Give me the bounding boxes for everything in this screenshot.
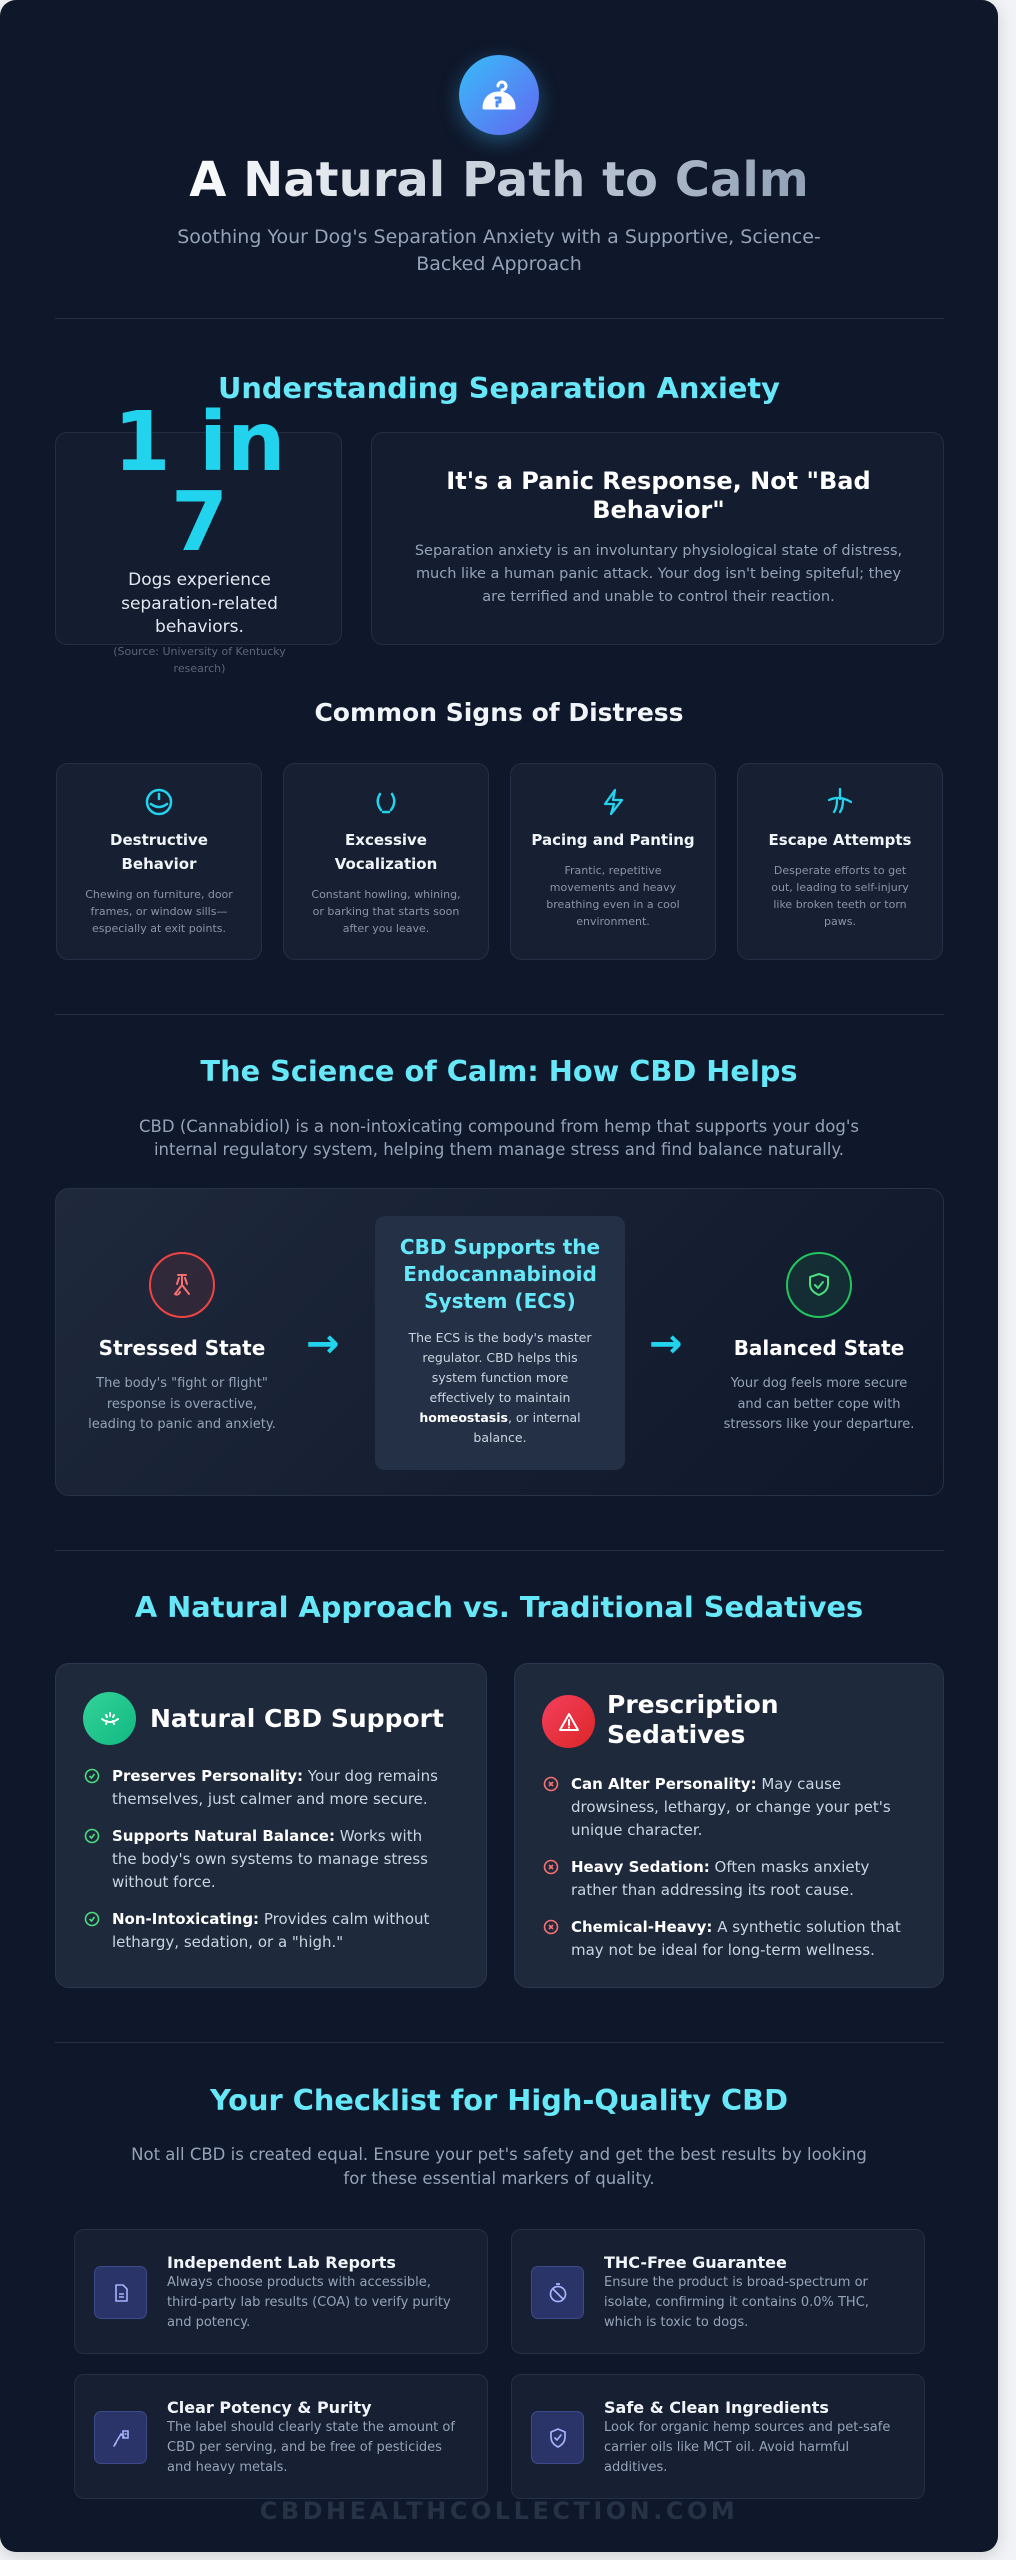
panic text: Separation anxiety is an involuntary physiological state of distress, much like a human panic attack. Your dog isn't being spiteful; they are terrified and unable to control their reaction. — [415, 543, 902, 605]
stressed state — [88, 1252, 276, 1432]
checklist: lab reports — [74, 2229, 488, 2354]
ecs box: The ECS is the body's master regulator. CBD helps this system function more effectively to maintain homeostasis, or internal balance. — [408, 1330, 592, 1445]
sign: escape — [737, 763, 943, 960]
sign: vocalization — [283, 763, 489, 960]
heading: common signs: Common Signs of Distress — [314, 698, 684, 727]
icon: leaf — [83, 1692, 136, 1745]
checklist: potency: The label should clearly state the amount of CBD per serving, and be free of pesticides and heavy metals. — [167, 2420, 455, 2475]
checklist: thc free: Ensure the product is broad-spectrum or isolate, confirming it contains 0.0% THC, which is toxic to dogs. — [604, 2275, 869, 2330]
stat number: 1 in — [113, 395, 286, 490]
sign: vocalization: Excessive Vocalization — [335, 831, 437, 873]
sign: destructive: Chewing on furniture, door frames, or window sills—especially at exit points. — [85, 888, 233, 935]
heading: comparison: A Natural Approach vs. Traditional Sedatives — [135, 1590, 863, 1624]
checklist: ingredients: Safe & Clean Ingredients — [604, 2398, 829, 2417]
checklist: lab reports: Independent Lab Reports — [167, 2253, 396, 2272]
checklist: ingredients — [511, 2374, 925, 2499]
panel: ecs flow — [55, 1188, 944, 1496]
sedatives list: Heavy Sedation: Often masks anxiety rather than addressing its root cause. — [571, 1858, 869, 1899]
sedatives title: Prescription — [607, 1690, 779, 1719]
icon: shield — [786, 1252, 852, 1318]
sign: escape: Desperate efforts to get out, leading to self-injury like broken teeth or torn paws. — [771, 864, 909, 928]
sedatives title — [607, 1690, 779, 1749]
source: (Source: University of Kentucky research) — [113, 645, 286, 675]
natural list: Preserves Personality: Your dog remains themselves, just calmer and more secure. — [112, 1767, 438, 1808]
balanced state: Balanced State — [734, 1336, 904, 1360]
icon: stress — [149, 1252, 215, 1318]
natural list — [84, 1767, 438, 1951]
stressed state: The body's "fight or flight" response is overactive, leading to panic and anxiety. — [88, 1376, 276, 1432]
checklist: potency — [74, 2374, 488, 2499]
stat text: Dogs experience separation-related behaviors. — [121, 570, 278, 637]
ecs box — [375, 1216, 625, 1470]
sedatives list: Chemical-Heavy: A synthetic solution that may not be ideal for long-term wellness. — [571, 1918, 901, 1959]
icon: warning — [542, 1695, 595, 1748]
heading: understanding: Understanding Separation Anxiety — [218, 371, 780, 405]
panel: stat — [55, 432, 342, 645]
sedatives list — [544, 1775, 901, 1959]
checklist: lab reports: Always choose products with accessible, third-party lab results (COA) to verify purity and potency. — [167, 2275, 451, 2330]
panel: sedatives — [514, 1663, 944, 1988]
sign: destructive — [56, 763, 262, 960]
ecs box: CBD Supports the Endocannabinoid System (ECS) — [400, 1235, 600, 1313]
checklist: potency: Clear Potency & Purity — [167, 2398, 372, 2417]
stat number — [113, 395, 286, 570]
arrow 1: → — [306, 1321, 340, 1367]
header icon — [459, 55, 539, 135]
footer brand: CBDHEALTHCOLLECTION.COM — [260, 2497, 738, 2525]
sign: pacing: Pacing and Panting — [531, 831, 695, 849]
panel: panic response — [371, 432, 944, 645]
balanced state — [724, 1252, 914, 1432]
subtitle: Soothing Your Dog's Separation Anxiety with a Supportive, Science-Backed Approach — [177, 226, 821, 275]
stressed state: Stressed State — [99, 1336, 265, 1360]
panic heading: It's a Panic Response, Not "Bad Behavior" — [446, 467, 871, 524]
balanced state: Your dog feels more secure and can better cope with stressors like your departure. — [724, 1376, 914, 1432]
sign: pacing: Frantic, repetitive movements and heavy breathing even in a cool environment. — [546, 864, 680, 928]
sign: escape: Escape Attempts — [769, 831, 911, 849]
title — [0, 149, 998, 211]
sign: vocalization: Constant howling, whining, or barking that starts soon after you leave. — [311, 888, 461, 935]
checklist intro: Not all CBD is created equal. Ensure your pet's safety and get the best results by looking for these essential markers of quality. — [131, 2145, 867, 2188]
sedatives list: Can Alter Personality: May cause drowsiness, lethargy, or change your pet's unique character. — [571, 1775, 891, 1839]
panel: natural cbd — [55, 1663, 487, 1988]
arrow 2: → — [649, 1321, 683, 1367]
checklist: thc free — [511, 2229, 925, 2354]
heading: science: The Science of Calm: How CBD Helps — [200, 1054, 798, 1088]
heading: checklist: Your Checklist for High-Quality CBD — [210, 2083, 788, 2117]
sign: pacing — [510, 763, 716, 960]
sedatives title: Sedatives — [607, 1720, 745, 1749]
stat number: 7 — [171, 475, 228, 570]
science intro: CBD (Cannabidiol) is a non-intoxicating compound from hemp that supports your dog's internal regulatory system, helping them manage stress and find balance naturally. — [139, 1117, 859, 1159]
checklist: thc free: THC-Free Guarantee — [604, 2253, 787, 2272]
sign: destructive: Destructive Behavior — [110, 831, 208, 873]
natural title: Natural CBD Support — [150, 1704, 444, 1733]
natural list: Supports Natural Balance: Works with the body's own systems to manage stress without force. — [112, 1827, 428, 1891]
checklist: ingredients: Look for organic hemp sources and pet-safe carrier oils like MCT oil. Avoid harmful additives. — [604, 2420, 890, 2475]
natural list: Non-Intoxicating: Provides calm without lethargy, sedation, or a "high." — [112, 1910, 429, 1951]
